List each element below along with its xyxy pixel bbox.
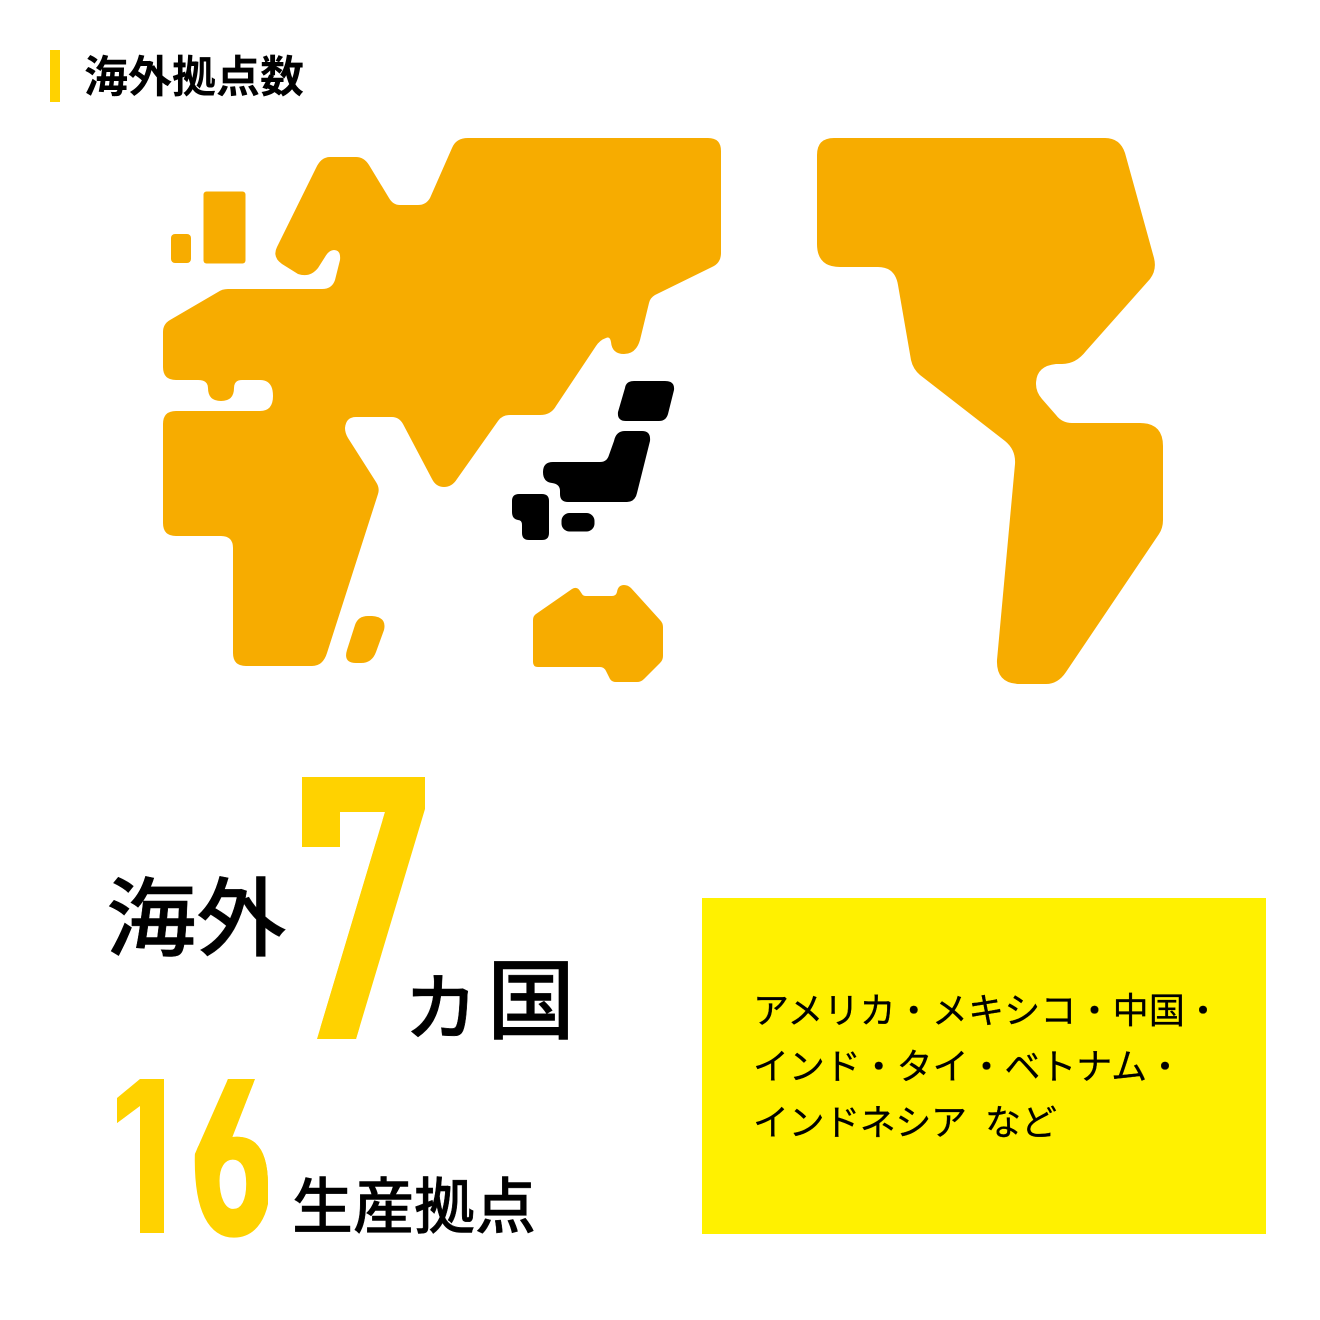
panel: country list (702, 898, 1266, 1234)
map: Eurasia and Africa (163, 138, 721, 666)
Shikoku (562, 513, 594, 532)
label: country kanji: 国 (487, 931, 575, 1058)
country list text: インドネシア (753, 1094, 967, 1146)
label: overseas: 海外 (106, 851, 286, 974)
country list text: アメリカ・メキシコ・中国・ (753, 982, 1221, 1034)
country list text: など (985, 1094, 1057, 1146)
map: Great Britain (204, 192, 246, 264)
map: Japan (512, 381, 674, 540)
map: Madagascar (346, 616, 384, 663)
map: Australia (533, 585, 663, 682)
statistic: sixteen production sites (117, 1079, 534, 1238)
number 7: 7 (281, 695, 434, 1120)
world map (163, 138, 1163, 684)
map: Americas (817, 138, 1163, 684)
map: Ireland (171, 234, 191, 263)
Honshu (543, 431, 650, 502)
statistic: seven countries (108, 777, 568, 1040)
heading: 海外拠点数 (84, 41, 304, 105)
Kyushu (512, 494, 549, 540)
label: production sites: 生産拠点 (292, 1157, 536, 1246)
number 7 (302, 777, 425, 1039)
number 16: 1 (102, 1030, 192, 1281)
Hokkaido (618, 381, 674, 421)
number 16 (117, 1079, 268, 1238)
number 16: 6 (191, 1033, 274, 1281)
label: countries: カ (404, 949, 478, 1056)
country list text: インド・タイ・ベトナム・ (753, 1038, 1183, 1090)
